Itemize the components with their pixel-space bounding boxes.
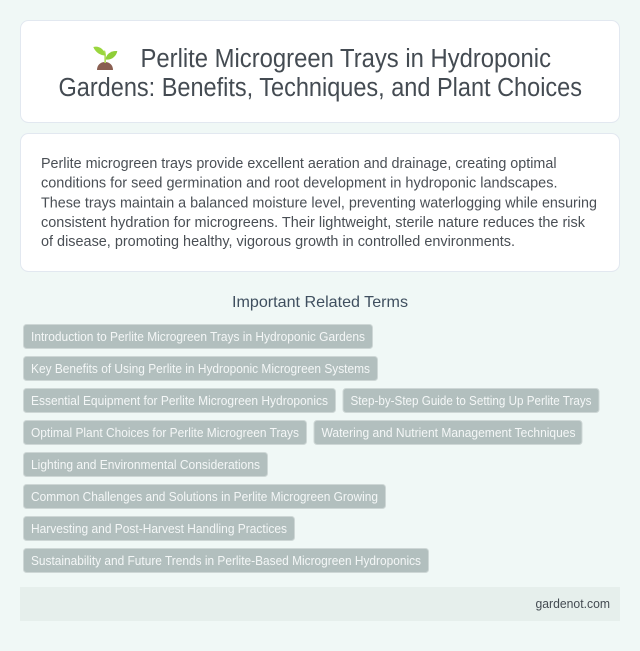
tag list xyxy=(24,324,599,572)
tag 5 xyxy=(24,420,306,444)
description text xyxy=(41,156,597,250)
tag 2 xyxy=(24,356,378,380)
title line 2: Gardens: Benefits, Techniques, and Plant Choices xyxy=(58,74,582,102)
description text: These trays maintain a balanced moisture level, preventing waterlogging while ensuring xyxy=(41,196,597,212)
tag 3 xyxy=(24,388,336,412)
tag 3: Essential Equipment for Perlite Microgreen Hydroponics xyxy=(31,394,328,408)
footer bar xyxy=(20,587,620,621)
description text: Perlite microgreen trays provide excellent aeration and drainage, creating optimal xyxy=(41,156,556,172)
description text: consistent hydration for microgreens. Their lightweight, sterile nature reduces the risk xyxy=(41,215,586,231)
description text: conditions for seed germination and root development in hydroponic landscapes. xyxy=(41,176,558,192)
tag 10 xyxy=(24,548,428,572)
title line 1: Perlite Microgreen Trays in Hydroponic xyxy=(140,45,551,73)
tag 8 xyxy=(24,484,386,508)
tag 8: Common Challenges and Solutions in Perlite Microgreen Growing xyxy=(31,490,378,504)
description text: of disease, promoting healthy, vigorous growth in controlled environments. xyxy=(41,234,515,250)
tag 5: Optimal Plant Choices for Perlite Microgreen Trays xyxy=(31,426,299,440)
tag 4 xyxy=(343,388,599,412)
panel: description xyxy=(20,134,620,272)
tag 6 xyxy=(314,420,582,444)
heading: important related terms: Important Related Terms xyxy=(232,294,408,311)
tag 10: Sustainability and Future Trends in Perlite-Based Microgreen Hydroponics xyxy=(31,554,421,568)
tag 9 xyxy=(24,516,294,540)
footer source text: gardenot.com xyxy=(536,597,610,611)
panel: title header xyxy=(20,20,620,122)
tag 1 xyxy=(24,324,372,348)
tag 7: Lighting and Environmental Considerations xyxy=(31,458,260,472)
tag 9: Harvesting and Post-Harvest Handling Practices xyxy=(31,522,287,536)
tag 1: Introduction to Perlite Microgreen Trays in Hydroponic Gardens xyxy=(31,330,365,344)
icon: seedling xyxy=(93,47,117,70)
tag 7 xyxy=(24,452,268,476)
tag 6: Watering and Nutrient Management Techniques xyxy=(322,426,576,440)
tag 2: Key Benefits of Using Perlite in Hydroponic Microgreen Systems xyxy=(31,362,370,376)
tag 4: Step-by-Step Guide to Setting Up Perlite Trays xyxy=(350,394,592,408)
